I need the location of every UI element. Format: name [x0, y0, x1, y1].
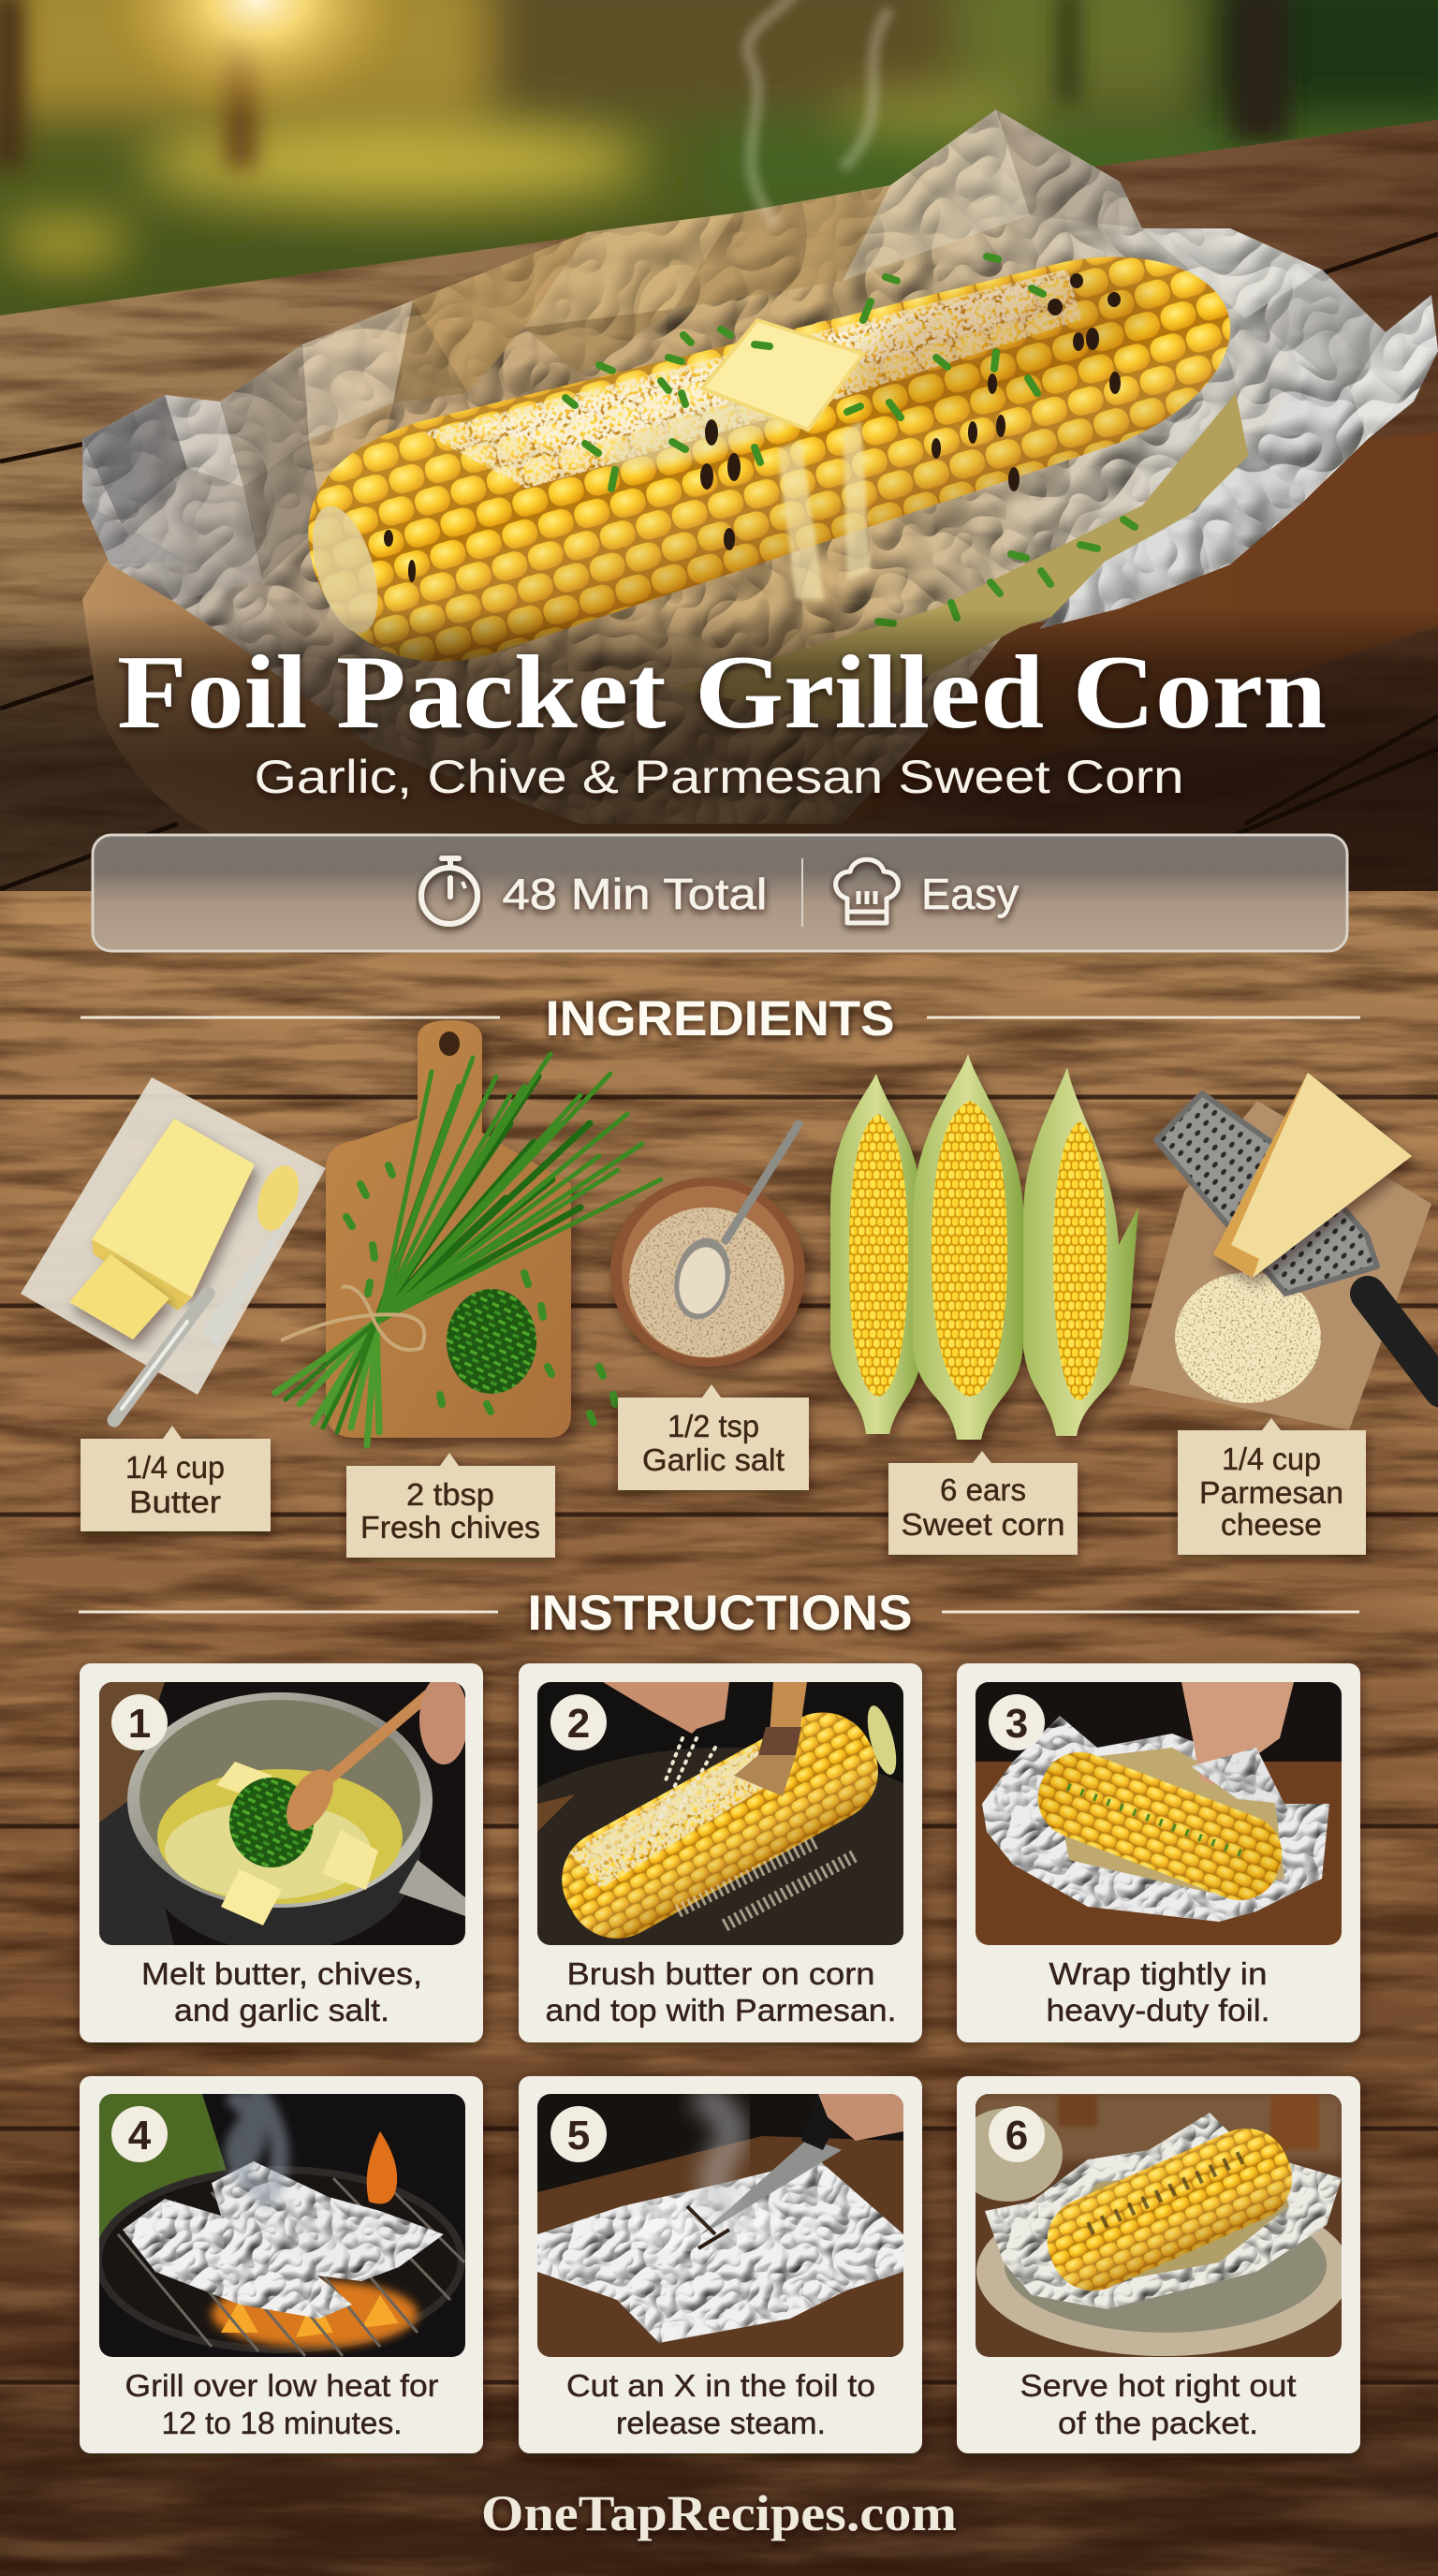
- step number 6: 6: [1005, 2113, 1028, 2159]
- panel: step 6: [954, 2076, 1360, 2453]
- ingredient: parmesan and grater: [1129, 1073, 1438, 1430]
- step 1 text: [141, 1956, 422, 2027]
- step 4 text: 12 to 18 minutes.: [161, 2406, 403, 2440]
- step 5 text: release steam.: [616, 2406, 826, 2440]
- title darkening: [0, 608, 1438, 891]
- step 2 text: Brush butter on corn: [567, 1956, 874, 1991]
- label: sweet corn: [888, 1451, 1078, 1555]
- heading: instructions: INSTRUCTIONS: [528, 1586, 912, 1641]
- corn ear 2: [913, 1054, 1023, 1440]
- panel: step 5: [519, 2076, 922, 2453]
- step 1 text: and garlic salt.: [174, 1993, 389, 2027]
- step 5 text: [566, 2368, 875, 2440]
- step number 3: 3: [1005, 1701, 1028, 1747]
- step number 1: [111, 1694, 168, 1750]
- icon: chef hat: [836, 859, 898, 923]
- label: sweet corn: 6 ears: [940, 1472, 1026, 1507]
- chive garnish: [565, 256, 1135, 623]
- step number 2: 2: [567, 1701, 590, 1747]
- step 1 text: Melt butter, chives,: [141, 1956, 422, 1991]
- step number 1: 1: [128, 1701, 151, 1747]
- footer website: OneTapRecipes.com: [481, 2485, 957, 2541]
- label: parmesan: Parmesan: [1199, 1475, 1343, 1510]
- label: butter: 1/4 cup: [125, 1450, 225, 1485]
- steam: [748, 0, 889, 225]
- step 3 text: Wrap tightly in: [1049, 1956, 1268, 1991]
- label: garlic salt: [618, 1384, 809, 1490]
- panel: step 1: [80, 1663, 483, 2042]
- step number 5: 5: [567, 2113, 590, 2159]
- corn cob: [283, 199, 1262, 695]
- cutting board: [82, 432, 1438, 838]
- heading: ingredients: INGREDIENTS: [545, 991, 895, 1046]
- difficulty label: Easy: [921, 870, 1019, 918]
- photo: cutting the foil packet: [537, 2094, 903, 2357]
- hero photo: foil packet corn: [0, 0, 1438, 891]
- ingredient: garlic salt bowl: [610, 1124, 805, 1367]
- label: chives: [346, 1453, 555, 1558]
- step 2 text: and top with Parmesan.: [545, 1993, 897, 2027]
- ingredient: chives on cutting board: [275, 1020, 661, 1445]
- label: garlic salt: Garlic salt: [642, 1442, 785, 1477]
- step 4 text: [125, 2368, 439, 2440]
- step 6 text: [1020, 2368, 1296, 2440]
- step 6 text: Serve hot right out: [1020, 2368, 1296, 2403]
- step number 2: [550, 1694, 607, 1750]
- table: [0, 112, 1438, 891]
- photo: wrapping corn in foil: [976, 1682, 1342, 1945]
- step number 3: [989, 1694, 1045, 1750]
- label: garlic salt: 1/2 tsp: [668, 1409, 759, 1443]
- label: parmesan: [1178, 1418, 1366, 1555]
- photo: melting butter in pot: [99, 1675, 468, 1952]
- info bar: [93, 835, 1347, 951]
- foil packet: [82, 110, 1438, 824]
- butter sauce: [674, 393, 1255, 721]
- ingredient: sweet corn: [830, 1054, 1138, 1440]
- step number 5: [550, 2106, 607, 2162]
- icon: stopwatch: [421, 858, 477, 924]
- panel: step 3: [957, 1663, 1360, 2042]
- foil front flap: [1039, 374, 1368, 629]
- subtitle: Garlic, Chive & Parmesan Sweet Corn: [255, 751, 1183, 803]
- ingredient labels: [81, 1384, 1366, 1558]
- step number 4: [111, 2106, 168, 2162]
- step number 6: [989, 2106, 1045, 2162]
- label: parmesan: cheese: [1221, 1507, 1322, 1542]
- panel: step 2: [511, 1661, 929, 2054]
- label: chives: 2 tbsp: [406, 1477, 494, 1512]
- label: chives: Fresh chives: [360, 1510, 540, 1544]
- park background: [0, 0, 1438, 346]
- panel: step 4: [80, 2076, 483, 2453]
- step 6 text: of the packet.: [1058, 2406, 1258, 2440]
- step 2 text: [545, 1956, 897, 2027]
- label: parmesan: 1/4 cup: [1222, 1442, 1321, 1476]
- ingredient: butter: [21, 1077, 326, 1420]
- page wood background: [0, 889, 1438, 2576]
- step 3 text: [1047, 1956, 1269, 2027]
- photo: corn served on plate: [954, 2094, 1351, 2357]
- step 5 text: Cut an X in the foil to: [566, 2368, 875, 2403]
- label: butter: [81, 1426, 271, 1531]
- title: Foil Packet Grilled Corn: [117, 635, 1327, 751]
- label: butter: Butter: [129, 1485, 221, 1519]
- step 4 text: Grill over low heat for: [125, 2368, 439, 2403]
- butter pat: [702, 320, 863, 430]
- photo: brushing butter on corn: [453, 1682, 996, 2038]
- time label: 48 Min Total: [502, 870, 768, 918]
- step 3 text: heavy-duty foil.: [1047, 1993, 1269, 2027]
- corn ear 3: [1023, 1067, 1138, 1436]
- step number 4: 4: [128, 2113, 152, 2159]
- corn ear 1: [830, 1074, 922, 1434]
- photo: foil packets on grill: [98, 2094, 465, 2357]
- label: sweet corn: Sweet corn: [901, 1507, 1065, 1542]
